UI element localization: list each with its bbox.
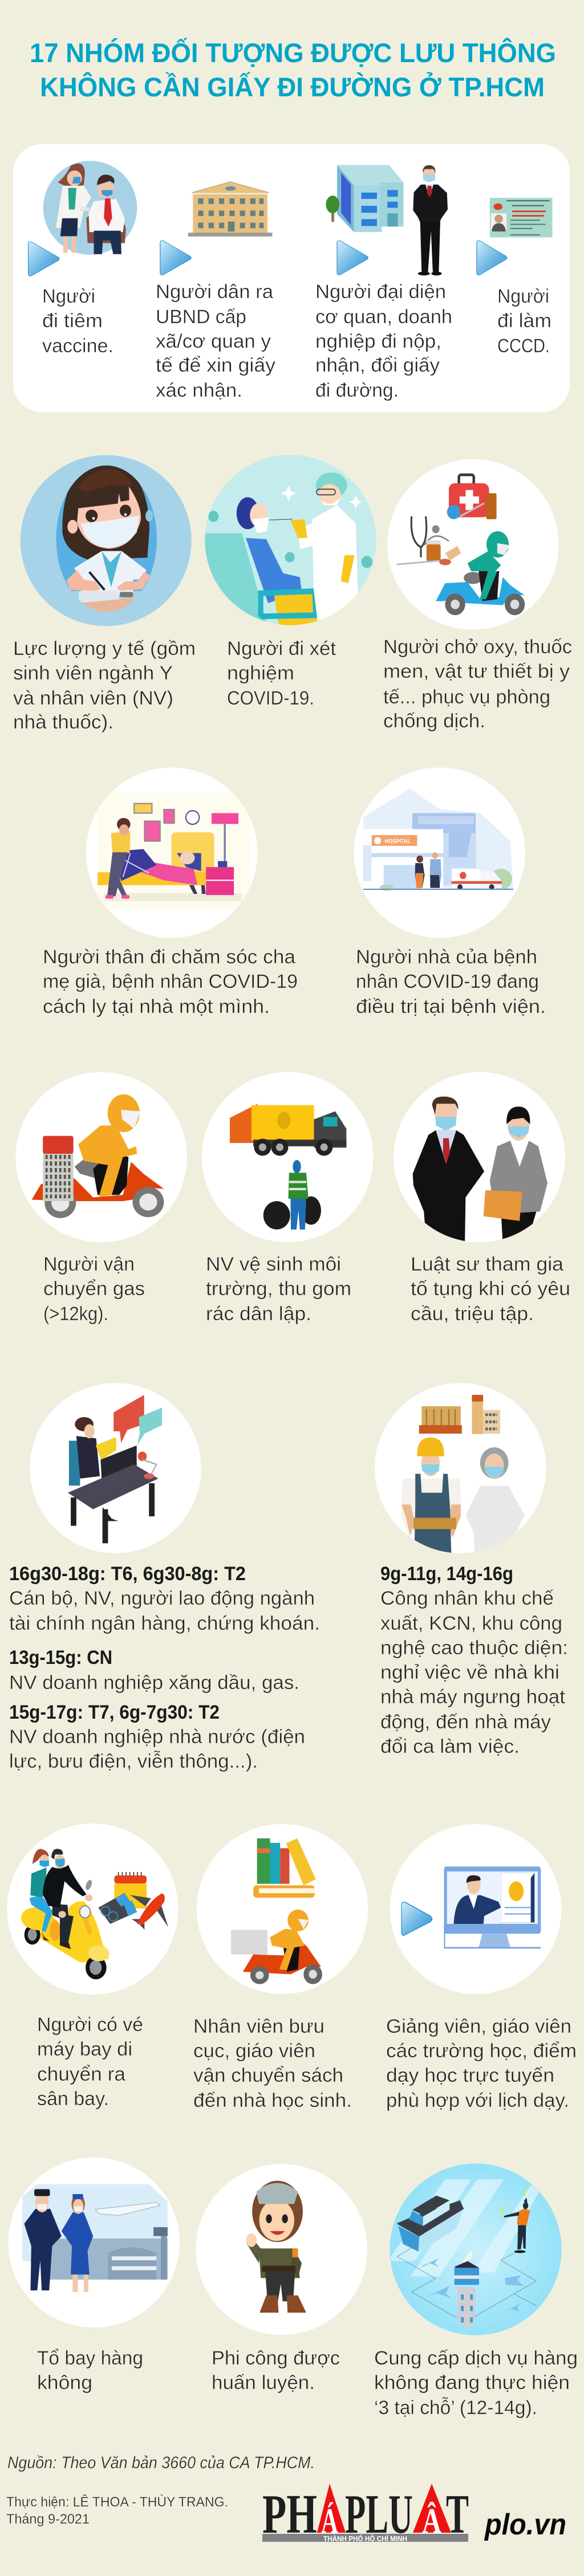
panel: vận chuyển gas bbox=[15, 1072, 187, 1325]
panel: luật sư bbox=[394, 1072, 570, 1325]
text: điều trị tại bệnh viện. bbox=[356, 996, 546, 1018]
text: dạy học trực tuyến bbox=[386, 2065, 554, 2086]
text: men, vật tư thiết bị y bbox=[383, 661, 570, 682]
icon: lawyers bbox=[394, 1072, 565, 1244]
text bbox=[386, 2016, 577, 2111]
icon: play arrow bbox=[337, 241, 368, 275]
text: ‘3 tại chỗ’ (12-14g). bbox=[374, 2397, 537, 2419]
panel: white box with four groups bbox=[13, 144, 570, 412]
text bbox=[212, 2347, 340, 2394]
text: nghệ cao thuộc diện: bbox=[380, 1637, 568, 1659]
text: Người có vé bbox=[37, 2014, 143, 2036]
text: mẹ già, bệnh nhân COVID-19 bbox=[43, 971, 298, 992]
icon: medical staff bbox=[21, 455, 192, 626]
text: người dân ra UBND: tế để xin giấy bbox=[156, 355, 275, 376]
text: Người chở oxy, thuốc bbox=[383, 636, 572, 658]
text: làm CCCD: đi làm bbox=[497, 310, 551, 332]
text: 16g30-18g: T6, 6g30-8g: T2 bbox=[9, 1563, 246, 1585]
text: sân bay. bbox=[37, 2088, 109, 2110]
text: tế... phục vụ phòng bbox=[383, 686, 550, 708]
text: làm CCCD bbox=[497, 286, 551, 357]
panel: dịch vụ hàng không bbox=[374, 2163, 578, 2419]
text bbox=[380, 1563, 568, 1757]
icon: hospital: HOSPITAL bbox=[385, 839, 411, 845]
icon: scooter to airport bbox=[7, 1824, 178, 1995]
panel: công nhân bbox=[375, 1383, 568, 1757]
text: đến nhà học sinh. bbox=[193, 2090, 352, 2111]
text: Người nhà của bệnh bbox=[356, 946, 537, 968]
text: (>12kg). bbox=[43, 1303, 108, 1325]
text: cầu, triệu tập. bbox=[411, 1303, 534, 1325]
text: Cán bộ, NV, người lao động ngành bbox=[9, 1588, 315, 1609]
text bbox=[193, 2016, 352, 2111]
text: người dân ra UBND bbox=[156, 281, 275, 401]
text: cục, giáo viên bbox=[193, 2040, 315, 2062]
panel: người thân chăm sóc bbox=[43, 767, 298, 1018]
text: tố tụng khi có yêu bbox=[411, 1278, 570, 1300]
text bbox=[411, 1254, 570, 1325]
text: phù hợp với lịch dạy. bbox=[386, 2090, 569, 2111]
icon: government building bbox=[188, 182, 272, 237]
logo: Pháp Luật: T bbox=[446, 2484, 469, 2545]
text: cách ly tại nhà một mình. bbox=[43, 996, 270, 1018]
text: người đại diện: Người đại diện bbox=[315, 281, 446, 303]
text: vận chuyển sách bbox=[193, 2065, 343, 2086]
panel: phi công bbox=[196, 2164, 367, 2394]
text: chuyển ra bbox=[37, 2064, 125, 2085]
text: Phi công được bbox=[212, 2347, 340, 2369]
text: lực, bưu điện, viễn thông...). bbox=[9, 1751, 258, 1772]
text: NV doanh nghiệp nhà nước (điện bbox=[9, 1726, 305, 1748]
icon: play arrow bbox=[477, 241, 507, 275]
panel: nhân viên văn phòng bbox=[9, 1383, 320, 1772]
logo: Pháp Luật bbox=[262, 2484, 469, 2545]
text: người đại diện: nhận, đổi giấy bbox=[315, 355, 440, 376]
credits: Tháng 9-2021 bbox=[6, 2512, 90, 2527]
text: làm CCCD: CCCD. bbox=[497, 335, 550, 357]
panel: vé máy bay bbox=[7, 1824, 178, 2110]
icon: medical delivery bbox=[387, 459, 559, 629]
text: người đại diện bbox=[315, 281, 452, 401]
panel: chở oxy, thuốc men bbox=[383, 459, 572, 732]
text: người dân ra UBND: xác nhận. bbox=[156, 380, 242, 401]
text: NV vệ sinh môi bbox=[206, 1254, 341, 1275]
title: KHÔNG CẦN GIẤY ĐI ĐƯỜNG Ở TP.HCM bbox=[40, 72, 545, 102]
icon: pilot bbox=[196, 2164, 367, 2335]
text: máy bay di bbox=[37, 2038, 132, 2060]
text: xuất, KCN, khu công bbox=[380, 1613, 562, 1634]
title bbox=[30, 38, 556, 102]
text: rác dân lập. bbox=[206, 1303, 311, 1325]
text: không đang thực hiện bbox=[374, 2372, 570, 2394]
text: chống dịch. bbox=[383, 710, 485, 732]
icon: garbage truck and worker bbox=[202, 1072, 373, 1242]
icon: vaccination bbox=[43, 161, 137, 255]
panel: nhân viên bưu cục bbox=[193, 1824, 368, 2111]
icon: online teaching bbox=[390, 1824, 561, 1994]
logo: Pháp Luật: Ậ bbox=[422, 2502, 441, 2541]
text bbox=[9, 1563, 320, 1772]
text bbox=[43, 946, 298, 1018]
text: Lực lượng y tế (gồm bbox=[13, 638, 196, 660]
icon: office worker at desk bbox=[30, 1383, 201, 1553]
text bbox=[356, 946, 546, 1018]
text: không bbox=[37, 2372, 92, 2394]
logo: Pháp Luật: Á bbox=[321, 2502, 338, 2541]
icon: hospital bbox=[354, 767, 525, 938]
text: Luật sư tham gia bbox=[411, 1254, 563, 1275]
text: tài chính ngân hàng, chứng khoán. bbox=[9, 1613, 320, 1634]
icon: citizen ID card bbox=[490, 198, 553, 237]
text bbox=[13, 638, 196, 733]
text: và nhân viên (NV) bbox=[13, 687, 173, 709]
text: chuyển gas bbox=[43, 1278, 145, 1300]
panel: tổ bay bbox=[8, 2158, 180, 2394]
text: huấn luyện. bbox=[212, 2372, 315, 2394]
text: Người thân đi chăm sóc cha bbox=[43, 946, 295, 968]
credits bbox=[6, 2494, 228, 2527]
text: trường, thu gom bbox=[206, 1278, 351, 1300]
text bbox=[227, 638, 336, 709]
text: Công nhân khu chế bbox=[380, 1588, 554, 1609]
icon: play arrow bbox=[402, 1902, 432, 1935]
icon: flight crew bbox=[8, 2158, 180, 2327]
text: 15g-17g: T7, 6g-7g30: T2 bbox=[9, 1702, 220, 1723]
text: tiêm vaccine: Người bbox=[42, 286, 95, 307]
panel: lực lượng y tế bbox=[13, 455, 196, 733]
icon: gas delivery scooter bbox=[15, 1072, 187, 1242]
text: 13g-15g: CN bbox=[9, 1647, 112, 1669]
logo: Pháp Luật: PH bbox=[262, 2484, 317, 2545]
credits: Thực hiện: LÊ THOA - THÙY TRANG. bbox=[6, 2494, 228, 2510]
panel: vệ sinh môi trường bbox=[202, 1072, 373, 1325]
text: Giảng viên, giáo viên bbox=[386, 2016, 571, 2037]
text: nhà máy ngưng hoạt bbox=[380, 1686, 566, 1708]
text bbox=[37, 2014, 143, 2110]
text: sinh viên ngành Y bbox=[13, 662, 173, 684]
icon: caring at home bbox=[86, 767, 257, 938]
text: đổi ca làm việc. bbox=[380, 1736, 520, 1757]
icon: play arrow bbox=[160, 241, 191, 275]
icon: books delivery bbox=[197, 1824, 368, 1994]
text: nghiệm bbox=[227, 662, 294, 684]
text bbox=[37, 2347, 143, 2394]
text: người dân ra UBND: UBND cấp bbox=[156, 306, 246, 328]
text: động, đến nhà máy bbox=[380, 1711, 551, 1733]
panel: giảng viên bbox=[386, 1824, 577, 2111]
text: COVID-19. bbox=[227, 687, 314, 709]
icon: factory workers bbox=[375, 1383, 546, 1559]
text: người dân ra UBND: xã/cơ quan y bbox=[156, 331, 271, 352]
text: 9g-11g, 14g-16g bbox=[380, 1563, 513, 1585]
text: người đại diện: đi đường. bbox=[315, 380, 399, 401]
text: người dân ra UBND: Người dân ra bbox=[156, 281, 273, 303]
text bbox=[383, 636, 572, 732]
icon: office building and businessman bbox=[326, 165, 448, 275]
text bbox=[374, 2347, 578, 2419]
text: Nhân viên bưu bbox=[193, 2016, 325, 2037]
text: các trường học, điểm bbox=[386, 2040, 577, 2062]
text bbox=[206, 1254, 351, 1325]
logo: Pháp Luật: PLU bbox=[345, 2484, 413, 2545]
text: người đại diện: nghiệp đi nộp, bbox=[315, 331, 441, 352]
text: người đại diện: cơ quan, doanh bbox=[315, 306, 452, 328]
text: tiêm vaccine: vaccine. bbox=[42, 335, 113, 357]
text: làm CCCD: Người bbox=[497, 286, 549, 307]
source note: Nguồn: Theo Văn bản 3660 của CA TP.HCM. bbox=[7, 2453, 315, 2472]
panel: người nhà bệnh nhân bbox=[354, 767, 546, 1018]
text: Người đi xét bbox=[227, 638, 336, 660]
text: nghỉ việc về nhà khi bbox=[380, 1662, 559, 1683]
text: tiêm vaccine: đi tiêm bbox=[42, 310, 103, 332]
text: Cung cấp dịch vụ hàng bbox=[374, 2347, 578, 2369]
text: Tổ bay hàng bbox=[37, 2347, 143, 2369]
text: nhân COVID-19 đang bbox=[356, 971, 539, 992]
text: NV doanh nghiệp xăng dầu, gas. bbox=[9, 1672, 299, 1694]
text: Người vận bbox=[43, 1254, 135, 1275]
icon: airport services bbox=[388, 2163, 562, 2335]
title: 17 NHÓM ĐỐI TƯỢNG ĐƯỢC LƯU THÔNG bbox=[30, 38, 556, 68]
text bbox=[43, 1254, 145, 1325]
icon: play arrow bbox=[29, 242, 59, 276]
icon: covid test bbox=[205, 455, 376, 629]
text: tiêm vaccine bbox=[42, 286, 113, 357]
logo: plo.vn: plo.vn bbox=[484, 2508, 566, 2541]
logo: Pháp Luật: THÀNH PHỐ HỒ CHÍ MINH bbox=[323, 2534, 407, 2543]
text: nhà thuốc). bbox=[13, 711, 113, 733]
panel: xét nghiệm bbox=[205, 455, 376, 709]
